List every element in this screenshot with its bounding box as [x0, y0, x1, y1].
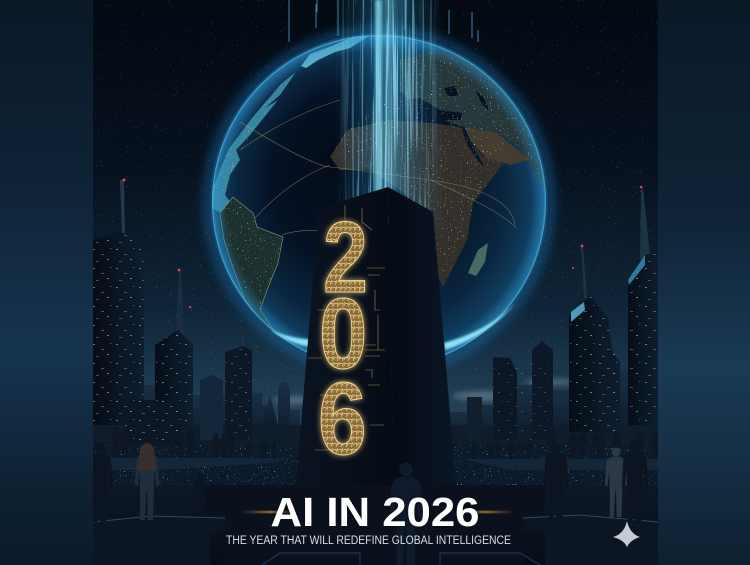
city lights on the globe	[212, 48, 545, 345]
fourth right tower	[493, 357, 517, 440]
landmasses	[212, 34, 545, 345]
city floor	[93, 445, 658, 485]
base glow edge	[240, 482, 545, 484]
left platform rim	[93, 516, 225, 522]
globe	[210, 33, 548, 371]
title: AI IN 2026: AI IN 2026	[270, 489, 480, 535]
reflected city lights	[93, 445, 658, 485]
digit 0: 0	[319, 277, 367, 389]
central man	[389, 463, 423, 565]
blurred right side panel	[658, 0, 750, 565]
third right tower	[532, 341, 553, 440]
Mediterranean	[408, 98, 462, 120]
blurred left side panel	[0, 0, 93, 565]
main scene	[87, 0, 659, 565]
horizon clouds	[273, 379, 576, 404]
right platform rim	[523, 515, 658, 522]
glowing year on the face	[318, 201, 368, 477]
left crowd	[111, 427, 277, 459]
icon: sparkle watermark	[613, 521, 640, 547]
right foreground platform	[523, 515, 658, 565]
rim light	[210, 33, 548, 371]
obelisk	[296, 187, 456, 485]
South America	[220, 197, 285, 345]
second right tower	[569, 186, 642, 432]
left skyline	[93, 178, 252, 445]
digit 2: 2	[323, 201, 368, 314]
right face	[388, 187, 456, 485]
Caspian Sea	[475, 90, 490, 112]
title flare	[240, 511, 515, 513]
right crowd	[472, 427, 659, 459]
globe glow	[209, 32, 549, 372]
night sky	[93, 0, 658, 425]
subtitle: THE YEAR THAT WILL REDEFINE GLOBAL INTELLIGENCE	[226, 535, 511, 547]
ocean sphere	[210, 33, 548, 371]
distant skyline	[144, 371, 628, 425]
left tower	[93, 178, 144, 425]
fifth right tower	[467, 397, 482, 440]
Black Sea	[444, 86, 458, 96]
tall man on right platform	[622, 440, 648, 523]
beam glow	[340, 0, 437, 225]
foreground people	[87, 440, 648, 565]
Arabia	[465, 127, 530, 165]
left face	[296, 187, 394, 485]
left mid platform	[103, 458, 290, 470]
circuit traces	[308, 205, 385, 450]
falling data lines	[289, 0, 478, 42]
floor panel outlines	[262, 553, 540, 565]
North America	[212, 72, 296, 215]
Greenland	[301, 34, 372, 68]
man at left edge	[87, 442, 113, 522]
low city band	[93, 425, 658, 445]
woman on left platform	[135, 443, 159, 520]
right tower	[628, 187, 658, 425]
bright lower crescent	[270, 302, 516, 350]
flight arcs	[240, 100, 516, 235]
third tower	[225, 335, 252, 440]
woman on right platform	[605, 447, 627, 517]
man on right platform	[544, 443, 568, 520]
data beam	[289, 0, 478, 225]
Madagascar	[468, 243, 488, 276]
central base	[205, 483, 545, 565]
beam streaks	[339, 0, 440, 210]
child	[194, 473, 206, 513]
left foreground platform	[93, 516, 225, 565]
right skyline	[467, 186, 658, 440]
Africa	[330, 120, 508, 287]
stars	[93, 0, 658, 400]
Europe and Asia	[400, 48, 545, 190]
low building	[125, 400, 180, 430]
beam core	[375, 0, 382, 200]
second tower	[155, 269, 193, 430]
fourth tower	[200, 375, 223, 440]
Red Sea	[462, 130, 484, 166]
right mid platform	[463, 459, 658, 470]
digit 6: 6	[318, 361, 367, 477]
